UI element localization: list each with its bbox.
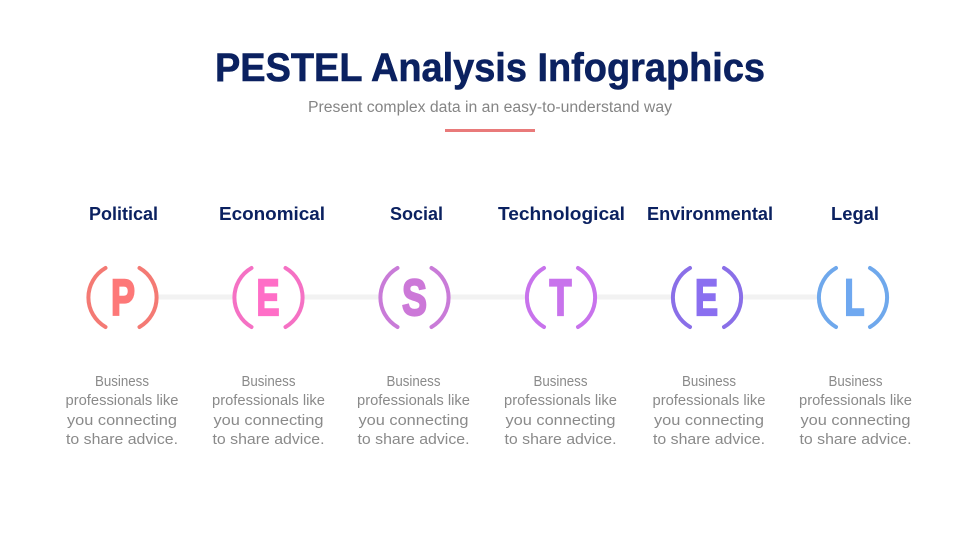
description: Business	[682, 373, 736, 390]
description: Business	[95, 373, 149, 390]
description: you connecting	[506, 412, 616, 429]
title accent rule	[445, 129, 535, 132]
heading: Economical: Economical	[219, 204, 325, 224]
column: Social	[357, 204, 470, 448]
icon: letter T in brackets: T	[550, 269, 572, 326]
description: to share advice.	[800, 431, 912, 448]
description	[66, 373, 178, 448]
description: to share advice.	[358, 431, 470, 448]
description	[652, 373, 766, 448]
description: you connecting	[800, 412, 910, 429]
icon: letter L in brackets	[817, 262, 889, 332]
description: to share advice.	[66, 431, 178, 448]
description	[799, 373, 912, 448]
description: professionals like	[66, 392, 178, 409]
description: Business	[534, 373, 588, 390]
icon: letter E in brackets: E	[256, 269, 280, 326]
column: Legal	[799, 204, 912, 448]
description: you connecting	[358, 412, 468, 429]
description: professionals like	[357, 392, 470, 409]
description: Business	[242, 373, 296, 390]
title: PESTEL Analysis Infographics	[215, 46, 765, 90]
icon: letter T in brackets	[525, 262, 596, 332]
description: to share advice.	[212, 431, 324, 448]
description: Business	[386, 373, 440, 390]
description: to share advice.	[504, 431, 616, 448]
description: professionals like	[799, 392, 912, 409]
heading: Technological: Technological	[498, 204, 625, 224]
icon: letter E in brackets	[233, 262, 304, 332]
heading: Legal: Legal	[831, 204, 879, 224]
subtitle: Present complex data in an easy-to-understand way	[308, 99, 672, 116]
description: you connecting	[214, 412, 324, 429]
column: Economical	[212, 204, 325, 448]
icon: letter S in brackets: S	[402, 269, 427, 326]
description: to share advice.	[653, 431, 765, 448]
description	[212, 373, 325, 448]
column: Environmental	[647, 204, 773, 448]
column: Political	[66, 204, 178, 448]
icon: letter E in brackets	[671, 262, 742, 332]
icon: letter P in brackets: P	[111, 269, 135, 326]
icon: letter E in brackets: E	[695, 269, 718, 326]
description: you connecting	[654, 412, 764, 429]
description	[504, 373, 617, 448]
description: professionals like	[212, 392, 325, 409]
icon: letter L in brackets: L	[844, 269, 864, 326]
column: Technological	[498, 204, 625, 448]
heading: Political: Political	[89, 204, 158, 224]
description: Business	[828, 373, 882, 390]
description: you connecting	[67, 412, 177, 429]
description: professionals like	[504, 392, 617, 409]
connector line	[158, 294, 822, 300]
heading: Social: Social	[390, 204, 443, 224]
description: professionals like	[652, 392, 766, 409]
icon: letter P in brackets	[87, 262, 158, 332]
heading: Environmental: Environmental	[647, 204, 773, 224]
description	[357, 373, 470, 448]
icon: letter S in brackets	[379, 262, 450, 332]
